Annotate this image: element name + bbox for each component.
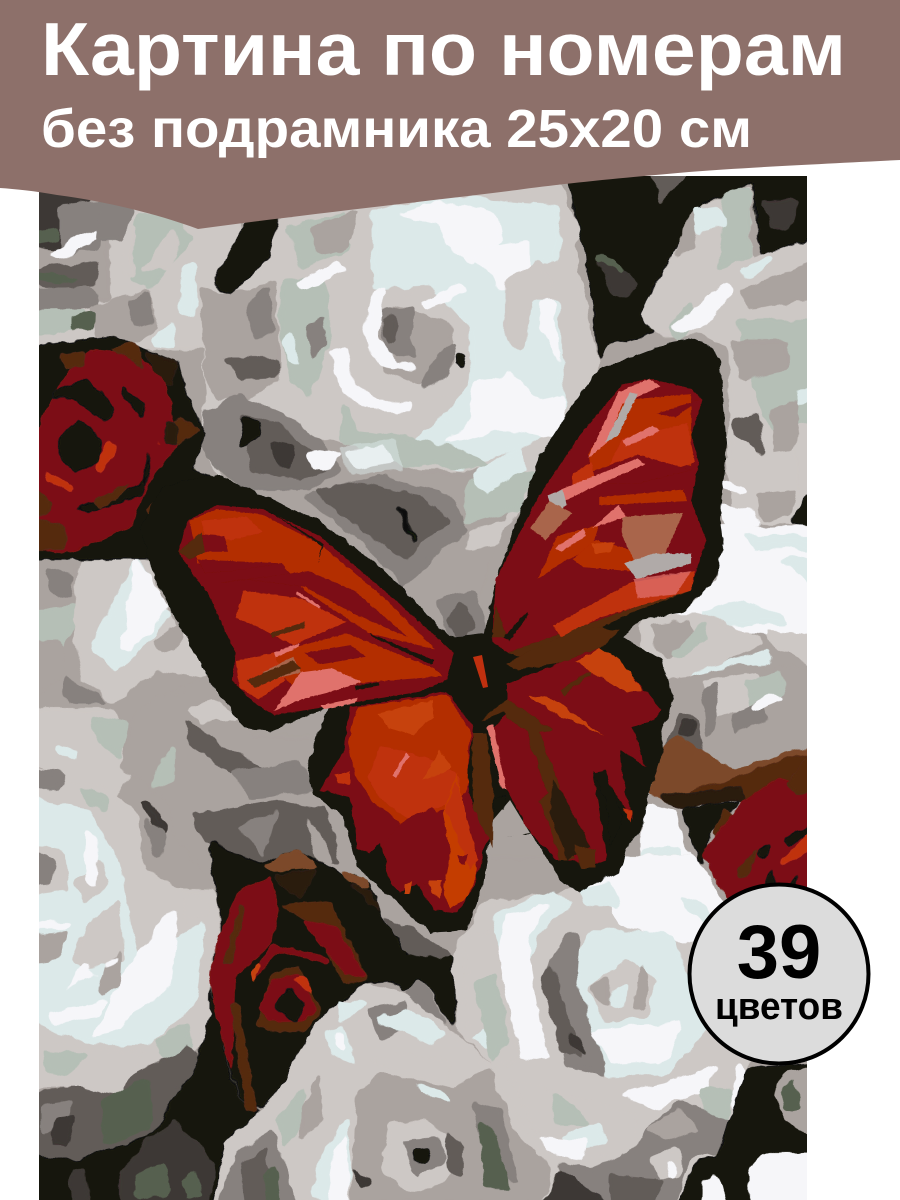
butterfly body mark	[473, 655, 488, 688]
badge: 39 colours: 39	[737, 910, 821, 995]
badge: 39 colours	[690, 884, 868, 1064]
background roses	[30, 170, 815, 1200]
rose: top left	[30, 185, 240, 350]
butterfly	[140, 339, 727, 933]
black: lower left	[39, 986, 260, 1200]
subtitle: без подрамника 25х20 см	[41, 99, 752, 159]
butterfly upper right wing, zoom coordinates	[492, 379, 706, 661]
butterfly lower right wing	[472, 627, 662, 868]
black area: top right	[568, 176, 807, 359]
red rose: lower centre	[209, 849, 385, 1112]
red rose: right edge	[682, 756, 807, 898]
rose: left white	[30, 540, 342, 889]
brown band right	[647, 735, 815, 810]
rose: upper right	[640, 188, 815, 530]
butterfly black outline and body	[140, 339, 727, 933]
rose: large top centre	[199, 185, 600, 650]
butterfly lower left wing	[320, 692, 490, 913]
rose: right grey	[664, 663, 786, 750]
white between butterfly and right rose	[640, 804, 692, 856]
rose: bottom right dark area	[673, 1063, 815, 1200]
red rose: left	[39, 336, 212, 562]
rose: lower left dark	[30, 1045, 202, 1159]
butterfly upper left wing, zoom coordinates	[178, 505, 454, 715]
black wedge with lower red rose	[209, 839, 456, 1112]
gray wedges beside rose	[383, 855, 573, 1030]
badge: 39 colours: цветов	[715, 986, 843, 1028]
butterfly gap grey	[492, 800, 530, 837]
rose: bottom centre	[212, 982, 553, 1200]
black wedge in the top rose	[214, 218, 278, 295]
rose: lower right white	[453, 855, 750, 1200]
title: Картина по номерам	[41, 7, 846, 91]
rose: right white area	[640, 525, 815, 685]
rose: bottom left white	[30, 767, 221, 1096]
banner	[0, 0, 900, 229]
painting: butterfly among roses	[30, 170, 815, 1200]
